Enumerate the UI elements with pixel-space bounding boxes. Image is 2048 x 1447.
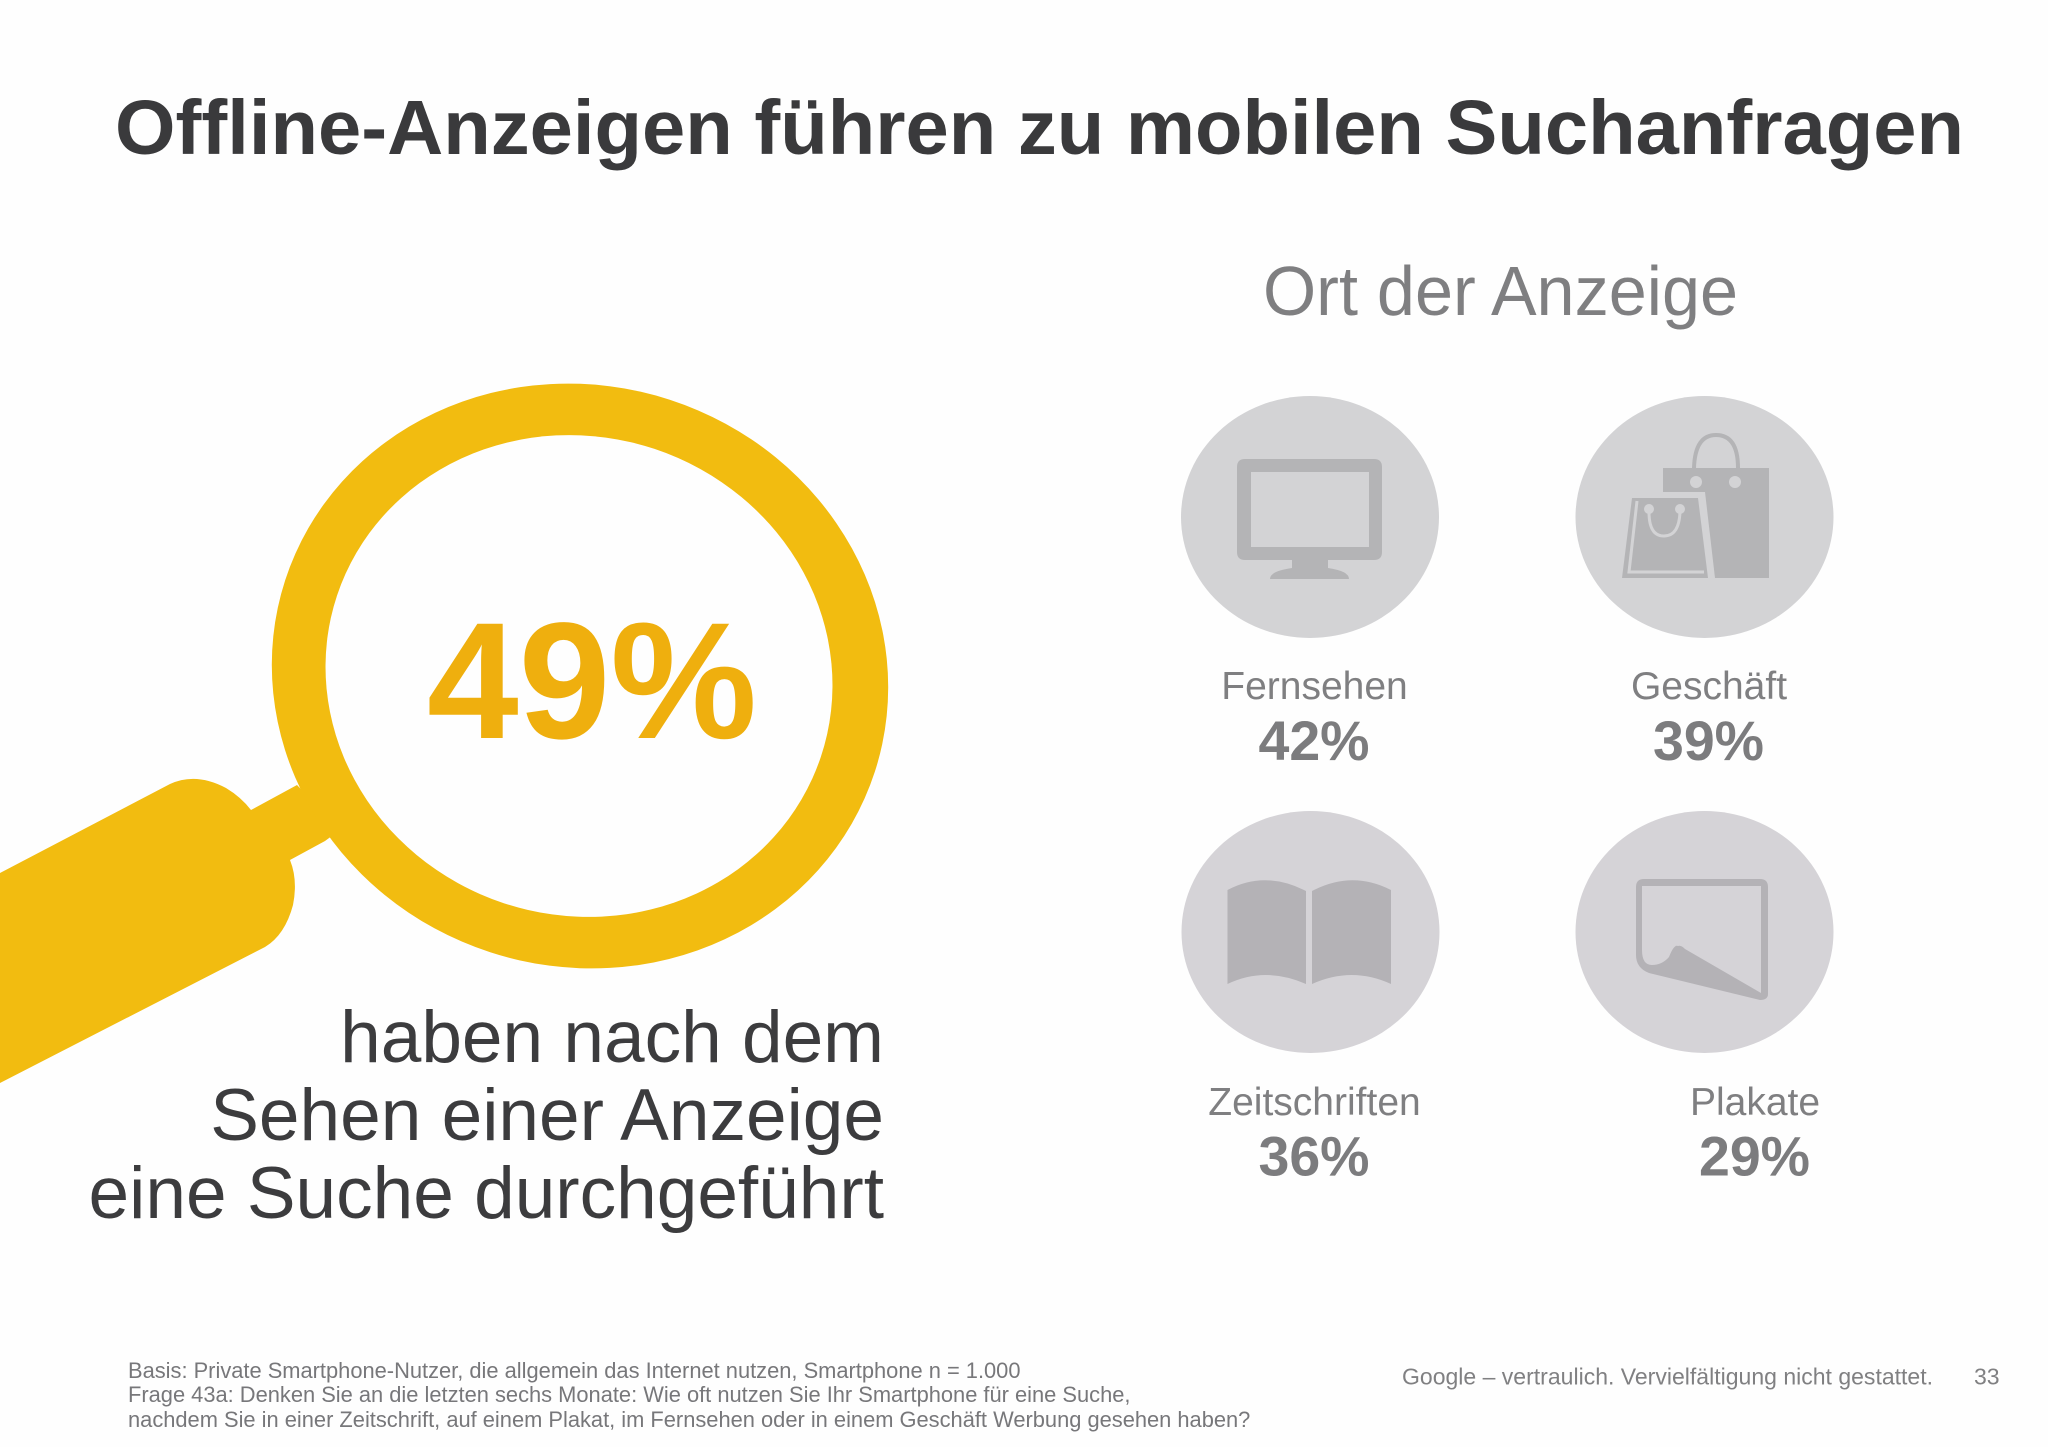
label: Geschäft [1631, 665, 1787, 708]
circle [1576, 811, 1834, 1053]
big percentage: 49% [427, 589, 757, 774]
footnote: nachdem Sie in einer Zeitschrift, auf einem Plakat, im Fernsehen oder in einem Geschäft Werbung gesehen haben? [128, 1407, 1250, 1432]
value: 42% [1258, 710, 1370, 772]
panel: Plakate [1576, 811, 1834, 1188]
statistic description: eine Suche durchgeführt [89, 1153, 884, 1234]
footnote: Basis: Private Smartphone-Nutzer, die allgemein das Internet nutzen, Smartphone n = 1.000 [128, 1358, 1020, 1383]
circle [1182, 811, 1440, 1053]
footnote [128, 1358, 1250, 1432]
panel: Fernsehen [1181, 396, 1439, 772]
circle [1576, 396, 1834, 638]
icon: poster with curled corner [1636, 879, 1768, 1000]
panel: Zeitschriften [1182, 811, 1440, 1188]
page number: 33 [1974, 1364, 2000, 1390]
panel: magnifying glass statistic [0, 304, 965, 1234]
footnote: Frage 43a: Denken Sie an die letzten sechs Monate: Wie oft nutzen Sie Ihr Smartphone für eine Suche, [128, 1382, 1130, 1407]
icon: magnifying glass [0, 304, 965, 1083]
statistic description: haben nach dem [340, 997, 884, 1078]
confidentiality notice: Google – vertraulich. Vervielfältigung nicht gestattet. [1402, 1364, 1933, 1390]
statistic description [89, 997, 884, 1234]
icon: open book [1228, 880, 1391, 984]
icon: shopping bags [1622, 435, 1769, 578]
value: 36% [1258, 1126, 1370, 1188]
value: 39% [1653, 710, 1764, 772]
panel: Geschäft [1576, 396, 1834, 772]
icon: television [1237, 459, 1382, 579]
label: Plakate [1690, 1081, 1820, 1124]
circle [1181, 396, 1439, 638]
value: 29% [1699, 1126, 1810, 1188]
label: Zeitschriften [1208, 1081, 1421, 1124]
heading: Ort der Anzeige: Ort der Anzeige [1263, 252, 1738, 330]
title: Offline-Anzeigen führen zu mobilen Suchanfragen [115, 85, 1964, 171]
label: Fernsehen [1221, 665, 1408, 708]
statistic description: Sehen einer Anzeige [210, 1075, 884, 1156]
